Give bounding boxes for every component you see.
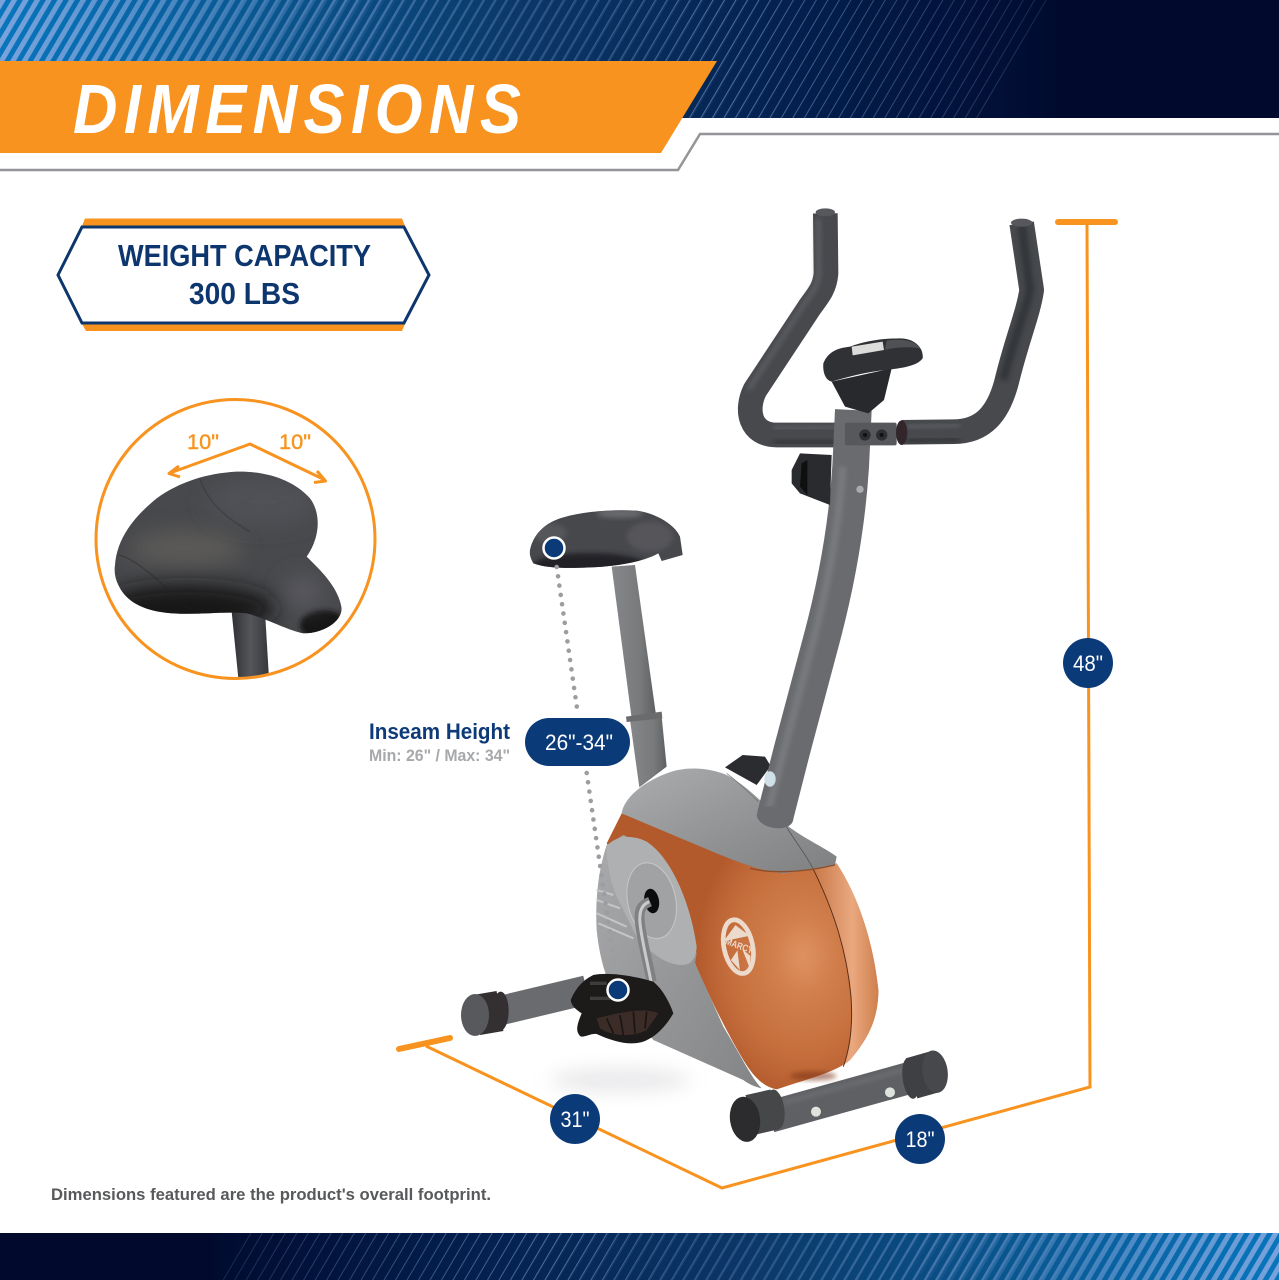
marcy logo: MARCY bbox=[724, 936, 755, 956]
seat width arrows bbox=[169, 444, 326, 482]
length badge bbox=[550, 1094, 600, 1144]
rear stabilizer bar bbox=[500, 990, 587, 1011]
seat detail inset bbox=[96, 400, 375, 678]
console bbox=[832, 368, 892, 413]
width badge: 18" bbox=[906, 1127, 934, 1152]
handlebar assembly bbox=[748, 208, 1032, 831]
width badge bbox=[895, 1114, 945, 1164]
floor shadow bbox=[550, 1068, 690, 1092]
seat marker bbox=[544, 538, 564, 558]
knob bbox=[792, 453, 832, 505]
front stabilizer bbox=[770, 1075, 920, 1117]
crank ring bbox=[607, 837, 697, 965]
height badge: 48" bbox=[1073, 651, 1103, 676]
silver side panel bbox=[596, 835, 762, 1088]
weight capacity badge: 300 LBS bbox=[189, 276, 300, 311]
marcy logo bbox=[719, 917, 760, 976]
rear pedal bbox=[725, 755, 771, 785]
main stem bbox=[755, 410, 853, 831]
flywheel housing bbox=[461, 769, 951, 1144]
inseam label: Inseam Height bbox=[369, 719, 511, 744]
title: DIMENSIONS bbox=[73, 69, 521, 148]
orange shell bbox=[607, 813, 878, 1089]
length badge: 31" bbox=[560, 1107, 590, 1132]
footnote: Dimensions featured are the product's overall footprint. bbox=[51, 1186, 491, 1204]
right handlebar bbox=[902, 223, 1032, 432]
left handlebar bbox=[750, 213, 847, 435]
weight capacity badge: WEIGHT CAPACITY bbox=[118, 238, 371, 273]
crank arm bbox=[640, 902, 652, 982]
inseam label bbox=[369, 719, 511, 765]
seat width labels: 10" bbox=[187, 431, 219, 454]
pedal bbox=[571, 974, 673, 1043]
header outline stroke bbox=[0, 134, 1279, 170]
seat width labels: 10" bbox=[279, 431, 311, 454]
silver top cover bbox=[622, 769, 837, 873]
bottom banner bbox=[0, 1233, 1279, 1280]
inseam pill bbox=[525, 718, 630, 766]
title ribbon bbox=[0, 61, 717, 153]
dimension lines bbox=[399, 222, 1115, 1188]
seat width labels bbox=[187, 431, 311, 454]
inseam dotted leader bbox=[557, 567, 614, 962]
stem sticker bbox=[764, 771, 776, 787]
exercise bike bbox=[461, 208, 1032, 1144]
weight capacity badge bbox=[58, 218, 429, 331]
inseam label: Min: 26" / Max: 34" bbox=[369, 746, 510, 765]
inseam pill: 26"-34" bbox=[545, 730, 613, 755]
pedal marker bbox=[608, 980, 628, 1000]
top banner bbox=[0, 0, 1279, 118]
height badge bbox=[1063, 638, 1113, 688]
vents bbox=[597, 890, 633, 938]
seat post and saddle bbox=[530, 509, 683, 787]
